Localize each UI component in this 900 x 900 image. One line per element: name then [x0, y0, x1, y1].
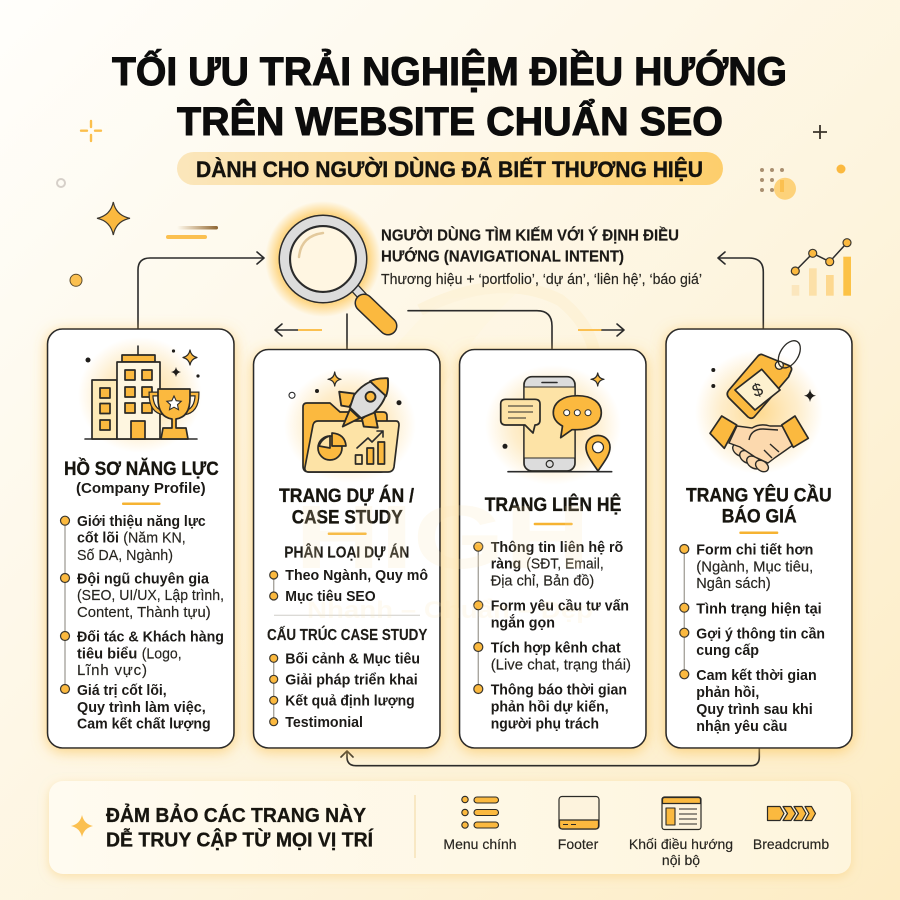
- connector: contact to search: [408, 311, 552, 350]
- search intent text: NGƯỜI DÙNG TÌM KIẾM VỚI Ý ĐỊNH ĐIỀU: [381, 226, 679, 245]
- item: main menu: [443, 796, 517, 852]
- list: company profile: (Năm KN,: [123, 530, 186, 547]
- list: company profile: (SEO, UI/UX, Lập trình,: [77, 587, 224, 604]
- list: contact: Thông tin liên hệ rõ: [491, 539, 623, 556]
- list: contact: Form yêu cầu tư vấn: [491, 598, 629, 615]
- list: project classification: Mục tiêu SEO: [285, 588, 376, 605]
- icon: price tag and handshake: $: [749, 379, 766, 401]
- list: quote request: nhận yêu cầu: [696, 718, 787, 735]
- list: company profile: Quy trình làm việc,: [77, 699, 206, 716]
- icon: magnifying glass: [265, 201, 388, 326]
- item: internal navigation block: nội bộ: [662, 852, 700, 868]
- list: quote request: Gợi ý thông tin cần: [696, 625, 825, 642]
- list: case study structure: [267, 625, 428, 731]
- list: contact: ngắn gọn: [491, 614, 555, 632]
- search intent text: Thương hiệu + ‘portfolio’, ‘dự án’, ‘liên hệ’, ‘báo giá’: [381, 272, 702, 288]
- panel: quote request: [666, 329, 852, 748]
- search intent text: [381, 226, 702, 288]
- icon: sparkle: [71, 815, 93, 837]
- icon: price tag and handshake: [695, 337, 823, 474]
- panel: contact: [460, 350, 646, 748]
- list: company profile: cốt lõi: [77, 530, 119, 547]
- subtitle pill: DÀNH CHO NGƯỜI DÙNG ĐÃ BIẾT THƯƠNG HIỆU: [196, 157, 703, 182]
- item: breadcrumb: [753, 806, 829, 852]
- heading: company profile: HỒ SƠ NĂNG LỰC: [64, 456, 219, 480]
- heading: quote request: TRANG YÊU CẦU: [686, 483, 832, 507]
- list: quote request: phản hồi,: [696, 684, 759, 701]
- list: company profile: [60, 513, 224, 733]
- list: company profile: (Logo,: [142, 646, 182, 663]
- list: case study structure: Giải pháp triển khai: [285, 672, 418, 689]
- panel: case study: [254, 350, 440, 748]
- list: company profile: Content, Thành tựu): [77, 604, 211, 621]
- list: quote request: Form chi tiết hơn: [696, 541, 813, 558]
- panel: company profile: [48, 329, 234, 748]
- list: contact: Tích hợp kênh chat: [491, 639, 621, 656]
- heading: case study: [279, 484, 415, 535]
- list: quote request: Quy trình sau khi: [696, 701, 813, 718]
- connector: case study to search: [346, 314, 348, 350]
- heading: quote request: BÁO GIÁ: [722, 505, 797, 528]
- item: footer: Footer: [558, 836, 599, 852]
- bottom heading: ĐẢM BẢO CÁC TRANG NÀY: [106, 804, 367, 827]
- list: contact: người phụ trách: [491, 715, 599, 732]
- title: TRÊN WEBSITE CHUẨN SEO: [177, 97, 723, 144]
- list: quote request: Cam kết thời gian: [696, 667, 817, 684]
- panel: bottom navigation bar: [49, 781, 851, 874]
- list: contact: ràng: [491, 556, 521, 573]
- connector: profile to search: [138, 252, 264, 329]
- list: contact: phản hồi dự kiến,: [491, 698, 609, 715]
- watermark text: [295, 488, 593, 624]
- item: breadcrumb: Breadcrumb: [753, 836, 829, 852]
- heading: case study: TRANG DỰ ÁN /: [279, 484, 415, 507]
- list: case study structure: Bối cảnh & Mục tiêu: [285, 650, 420, 667]
- list: contact: (Live chat, trạng thái): [491, 656, 631, 674]
- list: quote request: Ngân sách): [696, 575, 771, 592]
- search intent text: HƯỚNG (NAVIGATIONAL INTENT): [381, 247, 624, 266]
- list: quote request: (Ngành, Mục tiêu,: [696, 558, 813, 575]
- list: project classification: [270, 542, 428, 605]
- list: company profile: Giới thiệu năng lực: [77, 513, 206, 530]
- heading: contact: TRANG LIÊN HỆ: [485, 492, 621, 516]
- decoration: top-right dots: [760, 125, 846, 200]
- heading: case study: CASE STUDY: [292, 506, 403, 528]
- list: contact: Thông báo thời gian: [491, 681, 627, 698]
- watermark: [320, 287, 596, 500]
- heading: contact: [485, 492, 621, 525]
- bottom heading: DỄ TRUY CẬP TỪ MỌI VỊ TRÍ: [106, 828, 373, 852]
- list: contact: Địa chỉ, Bản đồ): [491, 572, 594, 590]
- list: company profile: tiêu biểu: [77, 646, 137, 663]
- watermark text: HIGH: [295, 488, 590, 588]
- list: company profile: Giá trị cốt lõi,: [77, 682, 167, 699]
- list: company profile: Đối tác & Khách hàng: [77, 629, 224, 646]
- bottom heading: [106, 804, 373, 852]
- decoration: top-left sparkles: [57, 121, 218, 286]
- list: case study structure: CẤU TRÚC CASE STUDY: [267, 625, 428, 644]
- icon: phone and chat: [485, 365, 621, 485]
- list: case study structure: Testimonial: [285, 714, 363, 731]
- list: quote request: [680, 541, 825, 735]
- item: internal navigation block: [629, 797, 733, 868]
- title: TỐI ƯU TRẢI NGHIỆM ĐIỀU HƯỚNG: [112, 48, 787, 94]
- list: quote request: Tình trạng hiện tại: [696, 600, 822, 617]
- list: contact: [474, 539, 631, 732]
- icon: building and trophy: [78, 337, 202, 453]
- watermark text: Nhanh – Chuẩn – Đẹp: [307, 597, 593, 624]
- arrow: right: [578, 324, 624, 336]
- connector: quote to search: [718, 252, 763, 329]
- heading: company profile: [64, 456, 219, 505]
- list: company profile: Đội ngũ chuyên gia: [77, 570, 210, 587]
- heading: quote request: [686, 483, 832, 534]
- item: internal navigation block: Khối điều hướng: [629, 836, 733, 852]
- item: main menu: Menu chính: [443, 836, 517, 852]
- title: [112, 48, 787, 144]
- list: case study structure: Kết quả định lượng: [285, 693, 415, 710]
- list: project classification: PHÂN LOẠI DỰ ÁN: [284, 542, 409, 561]
- connector: bottom return: [341, 748, 759, 766]
- item: footer: [558, 796, 599, 852]
- heading: company profile: (Company Profile): [76, 481, 206, 497]
- list: contact: (SĐT, Email,: [526, 556, 604, 573]
- list: quote request: cung cấp: [696, 642, 759, 659]
- list: company profile: Số DA, Ngành): [77, 547, 173, 564]
- list: company profile: Cam kết chất lượng: [77, 716, 211, 733]
- icon: folder and rocket: [284, 360, 416, 483]
- list: project classification: Theo Ngành, Quy mô: [285, 567, 428, 584]
- list: company profile: Lĩnh vực): [77, 662, 147, 679]
- arrow: left: [275, 324, 322, 336]
- icon: growth chart: [791, 239, 851, 296]
